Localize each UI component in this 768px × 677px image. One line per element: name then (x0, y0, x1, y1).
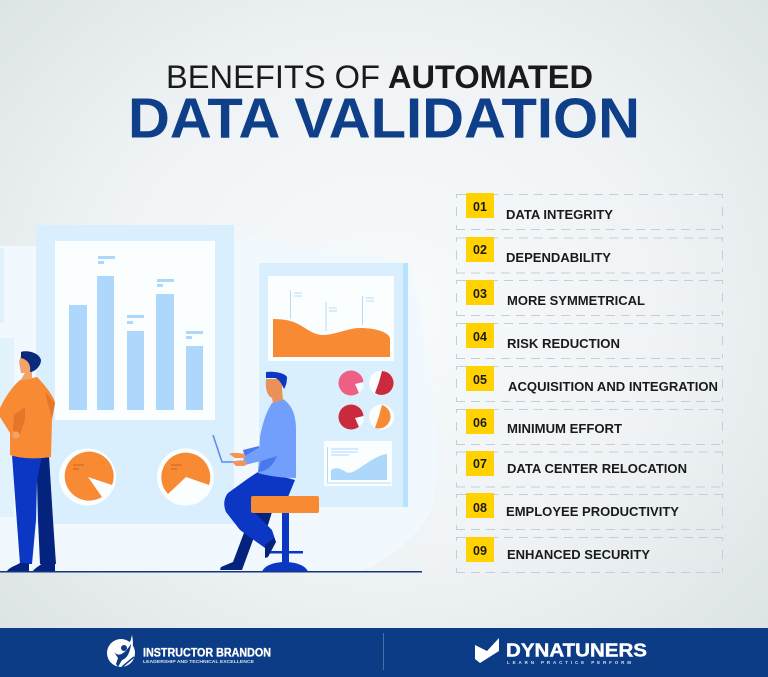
hair (21, 351, 41, 372)
mini area chart (324, 441, 392, 486)
benefit labels: MORE SYMMETRICAL (507, 294, 645, 308)
wordmark: DYNATUNERS (506, 640, 647, 660)
torso (258, 399, 296, 478)
far arm (243, 446, 260, 458)
title line 1: BENEFITS OF (166, 59, 380, 95)
neck and face (19, 352, 32, 381)
benefit labels: MINIMUM EFFORT (507, 422, 622, 436)
logo icon (107, 635, 135, 667)
front shoe (265, 538, 276, 558)
hand (12, 432, 20, 438)
pie: red outline (369, 370, 394, 396)
pie chart right (157, 448, 214, 506)
title line 1 emphasis: AUTOMATED (388, 59, 593, 95)
hands (229, 453, 245, 458)
badge numbers (473, 200, 487, 558)
wordmark: INSTRUCTOR BRANDON (143, 648, 271, 660)
badge numbers: 07 (473, 457, 487, 471)
pie: pink (338, 370, 364, 396)
pie: dark red (338, 404, 364, 430)
hair (266, 372, 287, 389)
badge numbers: 06 (473, 416, 487, 430)
back leg (220, 512, 272, 570)
title line 2: DATA VALIDATION (128, 86, 640, 150)
laptop (213, 435, 242, 462)
reference lines (290, 290, 374, 331)
benefit labels: ACQUISITION AND INTEGRATION (508, 380, 718, 394)
number badges (466, 193, 494, 562)
tagline: LEADERSHIP AND TECHNICAL EXCELLENCE (143, 659, 254, 664)
list of benefits (456, 193, 723, 572)
badge numbers: 04 (473, 330, 487, 344)
divider (383, 633, 384, 670)
badge numbers: 03 (473, 287, 487, 301)
panel: area chart board (259, 263, 408, 507)
benefit labels: DEPENDABILITY (506, 251, 612, 265)
illustration: data dashboards and people (0, 225, 437, 572)
bar chart (69, 256, 203, 410)
background blob (0, 238, 437, 572)
stool seat (251, 496, 319, 513)
stool (262, 512, 308, 572)
badge numbers: 01 (473, 200, 487, 214)
logo: Instructor Brandon (107, 635, 271, 667)
badge numbers: 02 (473, 243, 487, 257)
badge numbers: 09 (473, 544, 487, 558)
tagline: LEARN PRACTICE PERFORM (507, 660, 631, 665)
benefit labels (506, 208, 718, 562)
left edge panels (0, 248, 14, 517)
person seated with laptop (213, 372, 319, 572)
benefit labels: EMPLOYEE PRODUCTIVITY (506, 505, 680, 519)
shoes (7, 563, 29, 571)
pie chart left (59, 448, 116, 506)
head (266, 379, 283, 403)
pie: orange outline (369, 404, 394, 430)
panel: bar chart board (36, 225, 234, 524)
badge numbers: 05 (473, 373, 487, 387)
title (128, 59, 640, 150)
floor line (0, 571, 422, 572)
front leg (224, 472, 295, 548)
logo: Dynatuners (475, 638, 647, 665)
footer band (0, 628, 768, 677)
badge numbers: 08 (473, 501, 487, 515)
benefit labels: DATA CENTER RELOCATION (507, 462, 687, 476)
area chart (273, 319, 390, 357)
dashed row frames (456, 194, 723, 572)
light leg (12, 455, 42, 564)
check mark icon (475, 638, 499, 663)
person standing (0, 351, 56, 571)
benefit labels: ENHANCED SECURITY (507, 548, 651, 562)
dark leg (30, 456, 56, 564)
benefit labels: DATA INTEGRITY (506, 208, 614, 222)
near arm (243, 440, 277, 465)
torso (0, 377, 55, 458)
benefit labels: RISK REDUCTION (507, 337, 620, 351)
